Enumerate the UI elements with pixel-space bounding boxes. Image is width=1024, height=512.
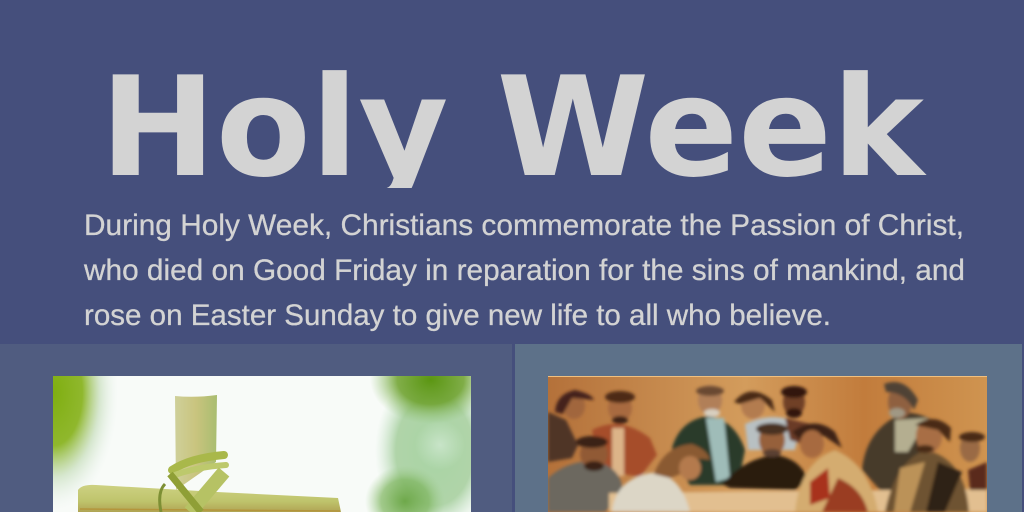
apostle in green robe bbox=[672, 416, 745, 485]
cross stem bbox=[175, 395, 217, 490]
central seated apostle bbox=[722, 455, 808, 490]
seated apostle in grey bbox=[548, 461, 622, 512]
apostle in red and gold bbox=[792, 424, 842, 448]
panel: palm cross bbox=[0, 344, 512, 512]
far right apostle bbox=[968, 462, 987, 490]
dark apostle bbox=[785, 418, 822, 450]
image: foot washing painting bbox=[548, 376, 987, 512]
cross bar bbox=[78, 485, 341, 512]
image: palm cross bbox=[53, 376, 471, 512]
Jesus washing feet bbox=[612, 473, 690, 512]
older apostle on right bbox=[862, 412, 938, 490]
apostle in orange robe bbox=[592, 424, 657, 477]
panel: last supper bbox=[515, 344, 1022, 512]
weave bbox=[160, 455, 226, 512]
intro text block: During Holy Week, Christians commemorate the Passion of Christ, bbox=[84, 209, 964, 242]
table cloth bbox=[609, 489, 987, 512]
intro text block: rose on Easter Sunday to give new life to all who believe. bbox=[84, 299, 831, 332]
intro text block bbox=[83, 209, 965, 332]
apostle in striped robe bbox=[885, 450, 969, 512]
far left apostle bbox=[548, 412, 578, 462]
young apostle bbox=[745, 417, 800, 450]
intro text block: who died on Good Friday in reparation for the sins of mankind, and bbox=[83, 254, 965, 287]
